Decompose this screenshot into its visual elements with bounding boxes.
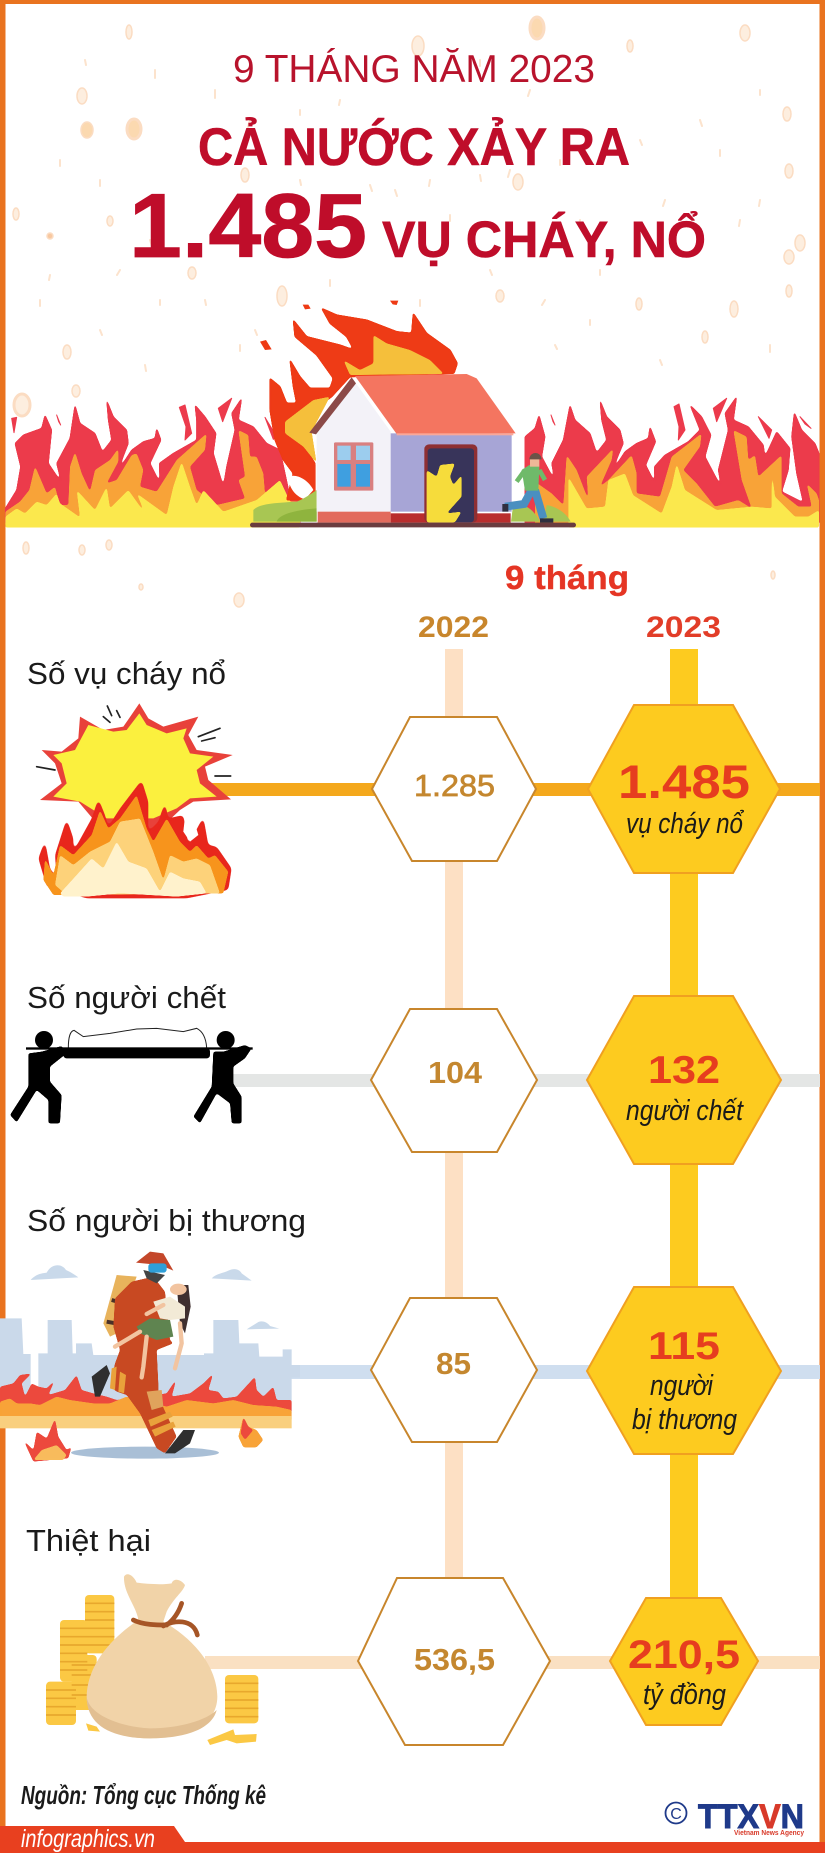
fire strip red bbox=[0, 1373, 292, 1413]
hexagon 2023: 1.485 vụ cháy nổ: 1.485 bbox=[618, 755, 750, 808]
firefighter bbox=[92, 1252, 195, 1453]
door with flame bbox=[424, 444, 477, 523]
row label: số vụ cháy nổ: Số vụ cháy nổ bbox=[27, 656, 226, 691]
rescued woman bbox=[115, 1284, 191, 1377]
hexagon 2022: 1.285 bbox=[372, 717, 536, 861]
burst outline bbox=[40, 703, 233, 835]
title block bbox=[129, 48, 706, 277]
title line: 9 tháng năm 2023: 9 THÁNG NĂM 2023 bbox=[233, 48, 595, 91]
flame cut out bbox=[288, 476, 313, 499]
fire strip base bbox=[0, 1416, 292, 1428]
foundation bbox=[318, 512, 391, 523]
hexagon 2023: 1.485 vụ cháy nổ bbox=[588, 705, 780, 873]
title line: cả nước xảy ra: CẢ NƯỚC XẢY RA bbox=[198, 117, 630, 177]
hexagon 2022: 1.285: 1.285 bbox=[414, 768, 495, 803]
wall left bbox=[317, 383, 391, 512]
row label: số người chết: Số người chết bbox=[27, 980, 226, 1015]
roof bbox=[355, 374, 516, 434]
fire outer bbox=[38, 780, 232, 898]
wall right bbox=[391, 433, 512, 512]
row connector: deaths bbox=[232, 1074, 820, 1087]
white cut out bbox=[183, 817, 198, 842]
icon: two people carrying stretcher bbox=[10, 1028, 253, 1123]
hexagon 2023: 115 người bị thương: bị thương bbox=[632, 1404, 737, 1436]
right bushes bbox=[511, 503, 571, 522]
body on stretcher bbox=[68, 1028, 207, 1048]
logo: TTXVN: Vietnam News Agency bbox=[734, 1830, 804, 1837]
row connector: damage bbox=[205, 1656, 820, 1669]
coin stacks bbox=[46, 1595, 258, 1745]
title number: 1.485: 1.485 bbox=[129, 176, 367, 277]
hexagon 2023: 132 người chết: 132 bbox=[648, 1049, 720, 1092]
icon: burning house with running person bbox=[250, 301, 576, 527]
hexagon 2022: 104: 104 bbox=[428, 1055, 483, 1090]
house flame bbox=[270, 308, 457, 500]
hexagon 2022: 536,5: 536,5 bbox=[414, 1642, 495, 1677]
stretcher bbox=[26, 1047, 253, 1050]
hexagon 2023: 132 người chết: người chết bbox=[626, 1095, 745, 1127]
hexagon 2023: 115 người bị thương: người bbox=[650, 1370, 714, 1402]
hexagon 2022: 85 bbox=[371, 1298, 537, 1442]
hexagon 2022: 85: 85 bbox=[436, 1346, 471, 1381]
vertical track 2022 bbox=[445, 649, 463, 1579]
hexagon 2023: 115 người bị thương: 115 bbox=[648, 1325, 720, 1368]
flame band left bbox=[5, 398, 300, 528]
hexagon 2023: 132 người chết bbox=[587, 996, 781, 1164]
sack bbox=[87, 1574, 217, 1738]
burst core bbox=[53, 713, 217, 818]
small flame right bbox=[238, 1417, 263, 1447]
logo: TTXVN: TTXVN bbox=[698, 1798, 804, 1836]
footer bar with site name bbox=[0, 1825, 825, 1853]
hexagon 2023: 210,5 tỷ đồng: tỷ đồng bbox=[643, 1679, 726, 1711]
small flame left bbox=[23, 1418, 72, 1462]
ground line bbox=[250, 523, 576, 527]
column header: 2023: 2023 bbox=[646, 611, 721, 644]
footer bar with site name: infographics.vn bbox=[21, 1825, 155, 1853]
ground shadow bbox=[71, 1447, 219, 1459]
icon: explosion with fire bbox=[37, 703, 233, 898]
icon: money bag and coins bbox=[46, 1574, 258, 1745]
flame band right bbox=[525, 397, 819, 528]
running person bbox=[502, 453, 553, 523]
left carrier bbox=[35, 1031, 53, 1049]
hexagon 2022: 104 bbox=[371, 1009, 537, 1152]
vertical track 2023 bbox=[670, 649, 698, 1599]
window bbox=[334, 442, 373, 491]
row connector: injured bbox=[290, 1365, 820, 1379]
row connector: fires bbox=[205, 783, 820, 796]
column header: 2022: 2022 bbox=[418, 611, 489, 644]
sack tie bbox=[133, 1603, 197, 1635]
fire yellow bbox=[55, 818, 220, 895]
sack shadow bbox=[87, 1697, 217, 1738]
icon: firefighter carrying victim bbox=[0, 1252, 300, 1462]
source note: Nguồn: Tổng cục Thống kê bbox=[21, 1780, 266, 1810]
hexagon 2023: 115 người bị thương bbox=[587, 1287, 781, 1454]
skyline bbox=[0, 1318, 300, 1413]
title line: vụ cháy, nổ: VỤ CHÁY, NỔ bbox=[382, 210, 706, 268]
house flame inner glow bbox=[285, 335, 444, 463]
hexagon 2023: 210,5 tỷ đồng: 210,5 bbox=[628, 1633, 740, 1677]
row label: số người bị thương: Số người bị thương bbox=[27, 1203, 306, 1238]
column header: 9 tháng: 9 tháng bbox=[505, 559, 629, 596]
hexagon 2022: 536,5 bbox=[358, 1578, 550, 1745]
fire orange bbox=[43, 795, 228, 895]
row label: thiệt hại: Thiệt hại bbox=[26, 1523, 151, 1558]
eave bbox=[309, 377, 356, 434]
hexagon 2023: 210,5 tỷ đồng bbox=[610, 1598, 758, 1725]
fire strip orange bbox=[0, 1397, 292, 1422]
flame sparks bbox=[260, 301, 398, 350]
clouds bbox=[31, 1265, 279, 1329]
logo: TTXVN: C bbox=[670, 1806, 682, 1823]
left bush bbox=[253, 490, 317, 522]
hexagon 2023: 1.485 vụ cháy nổ: vụ cháy nổ bbox=[626, 808, 745, 840]
right carrier bbox=[217, 1031, 235, 1049]
burst ticks bbox=[37, 706, 231, 776]
fire cream bbox=[60, 842, 207, 897]
